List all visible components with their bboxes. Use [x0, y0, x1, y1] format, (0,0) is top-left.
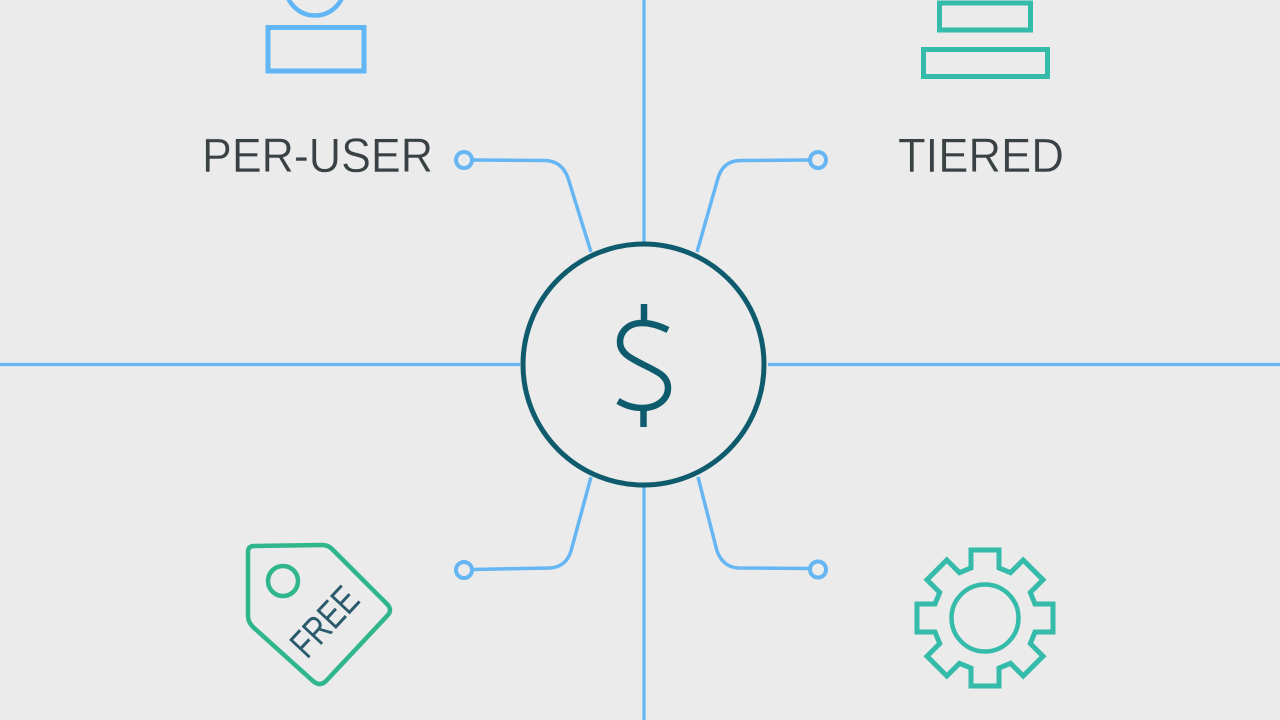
connector: bottom left: [456, 477, 591, 578]
connector: top left: [456, 152, 591, 252]
label: per-user: PER-USER: [202, 130, 433, 183]
connector: top right: [697, 152, 826, 252]
label: tiered: TIERED: [898, 130, 1064, 183]
connector: bottom right: [698, 477, 826, 578]
icon: dollar sign: [618, 304, 668, 427]
icon: per-user person: [268, 0, 364, 71]
central dollar badge: [523, 244, 764, 485]
icon: custom gear: [917, 550, 1053, 686]
tag text: free: FREE: [282, 578, 368, 666]
icon: free price tag: [248, 545, 390, 684]
icon: tiered stack: [924, 3, 1048, 76]
